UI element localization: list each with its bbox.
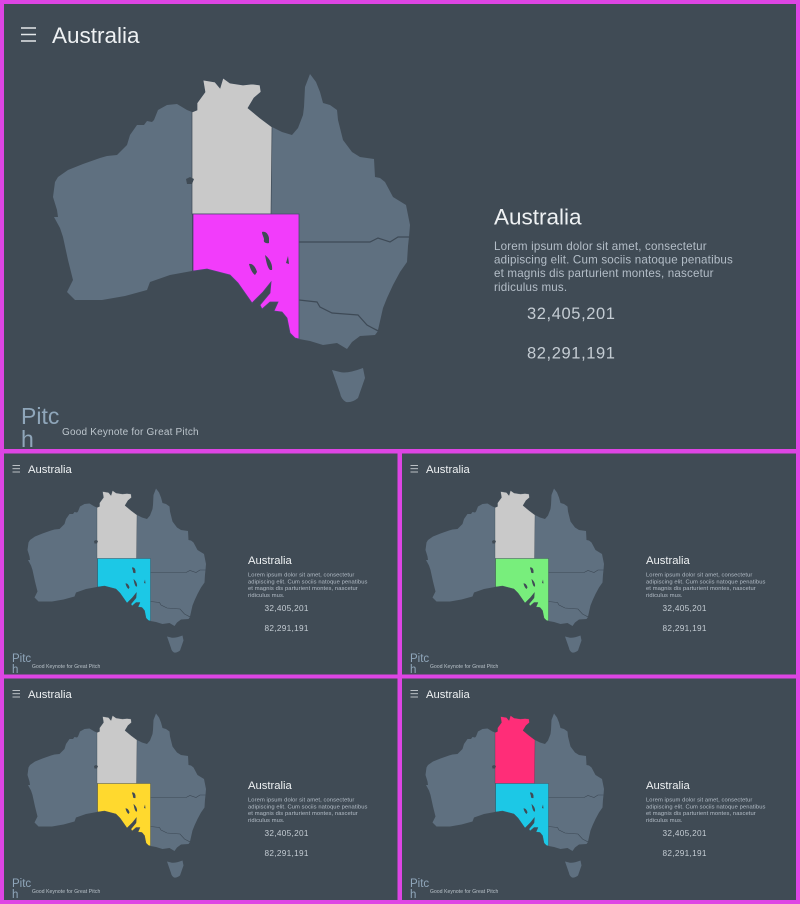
map: South Australia highlighted yellow bbox=[28, 714, 206, 878]
text block: ridiculus mus. bbox=[248, 593, 285, 599]
map: South Australia highlighted cyan bbox=[28, 488, 206, 653]
logo: h bbox=[21, 426, 34, 452]
statistic: 32,405,201 bbox=[527, 305, 616, 323]
icon: menu bbox=[21, 28, 36, 41]
panel: main Australia slide bbox=[21, 23, 733, 452]
icon: menu bbox=[12, 690, 20, 697]
icon: menu bbox=[12, 466, 20, 472]
text block: et magnis dis parturient montes, nascetur bbox=[646, 811, 756, 817]
logo: Pitc bbox=[12, 878, 31, 890]
text block: adipiscing elit. Cum sociis natoque penatibus bbox=[646, 804, 766, 810]
logo: Pitc bbox=[410, 878, 429, 890]
map: Australia with South Australia highlighted magenta bbox=[53, 74, 410, 402]
logo: h bbox=[12, 664, 18, 676]
logo: h bbox=[12, 889, 18, 901]
statistic: 82,291,191 bbox=[264, 849, 309, 858]
panel: green variant bbox=[410, 464, 766, 676]
text block: adipiscing elit. Cum sociis natoque penatibus bbox=[646, 579, 766, 585]
statistic: 82,291,191 bbox=[527, 344, 616, 362]
statistic: 32,405,201 bbox=[264, 604, 309, 613]
statistic: 32,405,201 bbox=[662, 829, 707, 838]
text block: adipiscing elit. Cum sociis natoque penatibus bbox=[248, 579, 368, 585]
statistic: 82,291,191 bbox=[264, 624, 309, 633]
text block: Lorem ipsum dolor sit amet, consectetur bbox=[494, 240, 707, 253]
text block: et magnis dis parturient montes, nascetur bbox=[494, 267, 714, 280]
tagline: Good Keynote for Great Pitch bbox=[32, 664, 101, 670]
icon: menu bbox=[410, 690, 418, 697]
text block: Lorem ipsum dolor sit amet, consectetur bbox=[248, 572, 354, 578]
logo: Pitc bbox=[21, 403, 59, 429]
text block: Lorem ipsum dolor sit amet, consectetur bbox=[248, 798, 354, 804]
heading: Australia bbox=[646, 780, 691, 792]
panel: pink and cyan variant bbox=[410, 689, 766, 901]
tagline: Good Keynote for Great Pitch bbox=[62, 427, 199, 438]
tagline: Good Keynote for Great Pitch bbox=[430, 889, 499, 895]
text block: ridiculus mus. bbox=[646, 818, 683, 824]
statistic: 32,405,201 bbox=[662, 604, 707, 613]
text block: Lorem ipsum dolor sit amet, consectetur bbox=[646, 798, 752, 804]
map: Northern Territory pink, South Australia cyan bbox=[426, 714, 604, 878]
panel: yellow variant bbox=[12, 689, 368, 901]
text block: ridiculus mus. bbox=[646, 593, 683, 599]
text block: adipiscing elit. Cum sociis natoque penatibus bbox=[248, 804, 368, 810]
title: Australia bbox=[28, 689, 73, 701]
heading: Australia bbox=[248, 780, 293, 792]
title: Australia bbox=[426, 689, 471, 701]
text block: et magnis dis parturient montes, nascetur bbox=[248, 811, 358, 817]
logo: Pitc bbox=[410, 653, 429, 665]
statistic: 82,291,191 bbox=[662, 624, 707, 633]
tagline: Good Keynote for Great Pitch bbox=[430, 664, 499, 670]
text block: et magnis dis parturient montes, nascetur bbox=[646, 586, 756, 592]
statistic: 82,291,191 bbox=[662, 849, 707, 858]
text block: ridiculus mus. bbox=[494, 281, 567, 294]
logo: Pitc bbox=[12, 653, 31, 665]
icon: menu bbox=[410, 466, 418, 472]
heading: Australia bbox=[646, 555, 691, 567]
text block: adipiscing elit. Cum sociis natoque penatibus bbox=[494, 254, 733, 266]
heading: Australia bbox=[248, 555, 293, 567]
title: Australia bbox=[426, 464, 471, 476]
map: South Australia highlighted green bbox=[426, 488, 604, 653]
logo: h bbox=[410, 889, 416, 901]
statistic: 32,405,201 bbox=[264, 829, 309, 838]
panel: cyan variant bbox=[12, 464, 368, 676]
title: Australia bbox=[28, 464, 73, 476]
tagline: Good Keynote for Great Pitch bbox=[32, 889, 101, 895]
logo: h bbox=[410, 664, 416, 676]
text block: et magnis dis parturient montes, nascetur bbox=[248, 586, 358, 592]
text block: ridiculus mus. bbox=[248, 818, 285, 824]
text block: Lorem ipsum dolor sit amet, consectetur bbox=[646, 572, 752, 578]
heading: Australia bbox=[494, 204, 582, 230]
title: Australia bbox=[52, 23, 140, 48]
